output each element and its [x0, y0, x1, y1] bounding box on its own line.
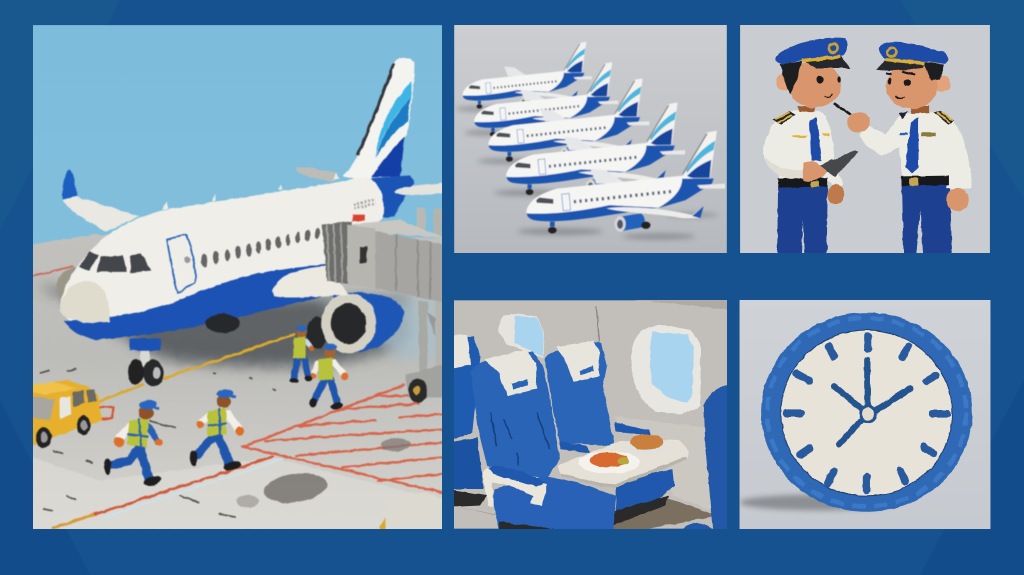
clock face — [780, 330, 953, 497]
head — [910, 106, 929, 114]
cap — [803, 55, 850, 68]
right pilot — [834, 42, 971, 260]
worker: running front left — [103, 400, 163, 487]
near wing — [272, 266, 349, 298]
right seat — [545, 341, 674, 525]
runway markings — [33, 266, 442, 528]
pen and hands — [834, 103, 861, 121]
airplane — [57, 58, 445, 386]
plane 3 — [488, 78, 649, 162]
panel: two pilots talking — [740, 25, 990, 253]
worker: standing far — [289, 325, 314, 384]
front seat — [471, 350, 616, 535]
nose gear — [129, 338, 161, 350]
left pilot — [763, 38, 858, 260]
panel: fleet of five airplanes — [454, 25, 727, 253]
clipboard and hands — [817, 151, 858, 177]
main gear — [205, 314, 240, 333]
panel: airplane cabin seats with meal tray — [454, 300, 727, 529]
plane 2 — [506, 102, 685, 195]
worker: walking by engine — [309, 344, 348, 411]
cap — [877, 60, 925, 71]
head — [776, 73, 794, 91]
worker: running middle — [189, 389, 244, 472]
plane 5 (farthest) — [462, 42, 592, 109]
plane 1 (nearest) — [526, 131, 725, 234]
specks — [40, 369, 276, 517]
clock rim — [761, 313, 972, 512]
cabin window left — [499, 314, 543, 358]
foreground bollard — [380, 492, 445, 534]
engine — [332, 292, 404, 353]
plane 4 — [474, 62, 618, 137]
clock center — [859, 405, 877, 423]
panel: airport apron with plane and ground crew — [33, 25, 442, 529]
clock ticks — [787, 337, 947, 491]
clock hands — [834, 360, 911, 444]
yellow tug vehicle — [26, 380, 113, 448]
panel: clay clock — [739, 300, 990, 529]
grass tufts — [236, 438, 410, 507]
rear seat left — [447, 334, 487, 507]
jet bridge — [322, 207, 445, 403]
foreground seat right — [679, 385, 734, 535]
meal tray — [557, 434, 689, 488]
cabin window right — [631, 325, 701, 414]
